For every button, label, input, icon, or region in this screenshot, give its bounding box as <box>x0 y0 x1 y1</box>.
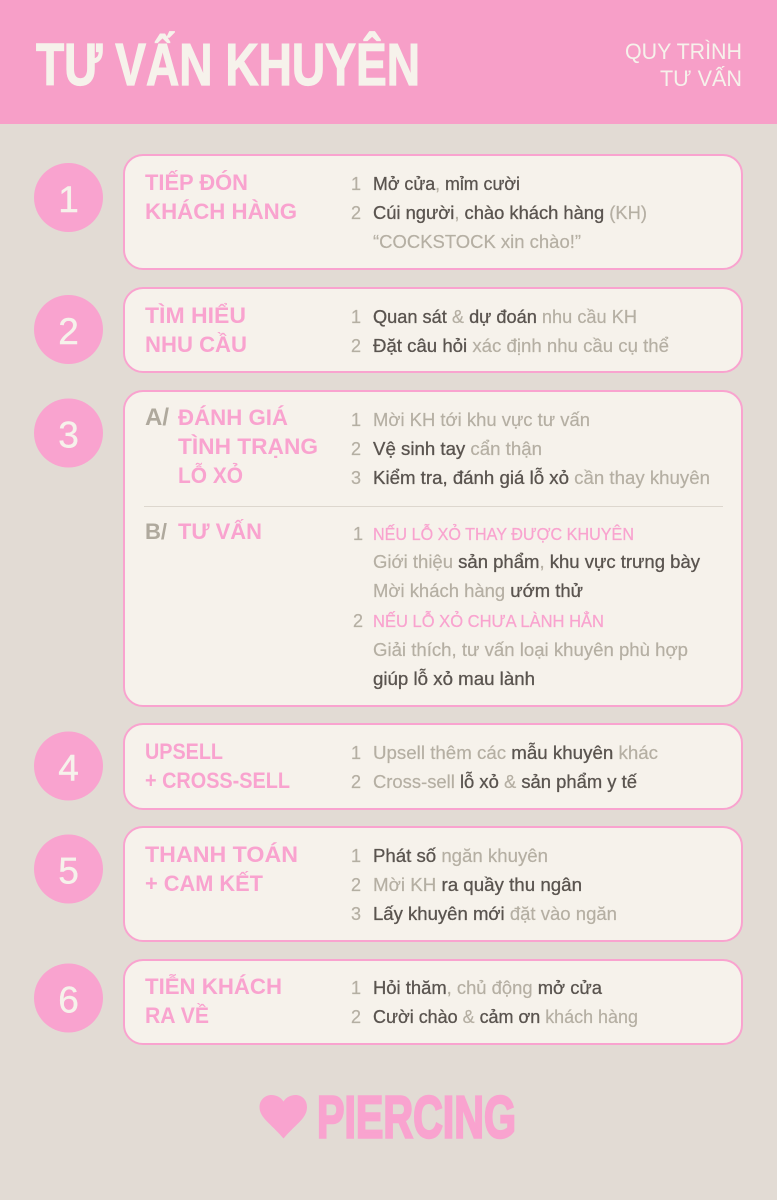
step 1 list: Cúi người, chào khách hàng (KH) <box>373 202 647 223</box>
step 2 <box>34 288 742 372</box>
header banner <box>0 0 777 124</box>
step 5 list <box>351 845 617 924</box>
logo wordmark: PIERCING <box>317 1084 516 1150</box>
step 6 list: Cười chào & cảm ơn khách hàng <box>373 1006 638 1027</box>
part B heading: B/ <box>145 519 167 544</box>
part A list: Kiểm tra, đánh giá lỗ xỏ cần thay khuyên <box>373 467 710 488</box>
step 5 list: 3 <box>351 904 361 924</box>
part A list: 2 <box>351 439 361 459</box>
step 1 heading: KHÁCH HÀNG <box>145 199 297 224</box>
subtitle: QUY TRÌNH <box>625 39 742 64</box>
step 4 <box>34 724 742 809</box>
part A list: Vệ sinh tay cẩn thận <box>373 438 542 459</box>
step 1 <box>34 155 742 269</box>
step 2 heading: NHU CẦU <box>145 332 247 357</box>
step 1 list: Mở cửa, mỉm cười <box>373 173 520 194</box>
step 5 heading: THANH TOÁN <box>145 842 298 867</box>
step 1 heading: TIẾP ĐÓN <box>145 170 248 195</box>
step 1 list: 1 <box>351 174 361 194</box>
step 3 number badge <box>34 398 103 468</box>
step 1 heading <box>145 170 297 224</box>
step 6 list: Hỏi thăm, chủ động mở cửa <box>373 977 603 998</box>
step 5 list: 2 <box>351 875 361 895</box>
subtitle: TƯ VẤN <box>660 66 742 91</box>
step 2 heading <box>145 303 247 357</box>
part A heading: ĐÁNH GIÁ <box>178 405 288 430</box>
panel: step 5 <box>124 827 742 941</box>
part A heading: A/ <box>145 404 169 431</box>
step 6 heading: RA VỀ <box>145 1003 209 1028</box>
step 2 list: Đặt câu hỏi xác định nhu cầu cụ thể <box>373 335 669 356</box>
step 6 heading: TIỄN KHÁCH <box>145 973 282 999</box>
icon: heart <box>260 1095 307 1138</box>
part B list <box>353 523 701 689</box>
step 2 heading: TÌM HIỂU <box>145 303 246 328</box>
part B list: NẾU LỖ XỎ THAY ĐƯỢC KHUYÊN <box>373 523 634 544</box>
step 5 number badge <box>34 834 103 904</box>
step 6 list: 2 <box>351 1007 361 1027</box>
step 5 number badge: 5 <box>58 850 79 892</box>
step 4 list: Cross-sell lỗ xỏ & sản phẩm y tế <box>373 771 638 792</box>
step 5 list: Mời KH ra quầy thu ngân <box>373 874 582 895</box>
step 1 list: 2 <box>351 203 361 223</box>
step 4 list: Upsell thêm các mẫu khuyên khác <box>373 742 658 763</box>
part B list: 2 <box>353 611 363 631</box>
part B list: 1 <box>353 524 363 544</box>
panel: step 2 <box>124 288 742 372</box>
panel: step 3 <box>124 391 742 706</box>
step 5 heading <box>145 842 298 896</box>
step 1 number badge: 1 <box>58 179 79 220</box>
part B list: Mời khách hàng ướm thử <box>373 580 583 601</box>
step 6 number badge: 6 <box>58 980 79 1020</box>
part A heading: TÌNH TRẠNG <box>178 434 318 459</box>
step 6 <box>34 960 742 1044</box>
step 4 list <box>351 742 658 792</box>
part A list: 1 <box>351 410 361 430</box>
step 5 list: Lấy khuyên mới đặt vào ngăn <box>373 903 617 924</box>
panel: step 1 <box>124 155 742 269</box>
step 5 list: 1 <box>351 846 361 866</box>
step 1 list: “COCKSTOCK xin chào!” <box>373 231 581 252</box>
panel: step 4 <box>124 724 742 809</box>
step 3 <box>34 391 742 706</box>
step 1 number badge <box>34 163 103 232</box>
step 6 number badge <box>34 964 103 1032</box>
step 2 number badge <box>34 295 103 364</box>
subtitle <box>625 39 742 91</box>
step 5 <box>34 827 742 941</box>
step 4 list: 1 <box>351 743 361 763</box>
step 4 number badge: 4 <box>58 748 79 788</box>
step 4 number badge <box>34 732 103 800</box>
step 6 list: 1 <box>351 978 361 998</box>
part B list: giúp lỗ xỏ mau lành <box>373 668 535 689</box>
step 4 list: 2 <box>351 772 361 792</box>
part A heading: LỖ XỎ <box>178 462 243 488</box>
step 3 number badge: 3 <box>58 414 79 456</box>
part A heading <box>145 404 318 488</box>
part B list: NẾU LỖ XỎ CHƯA LÀNH HẲN <box>373 610 604 631</box>
panel: step 6 <box>124 960 742 1044</box>
step 1 list <box>351 173 647 252</box>
part B list: Giải thích, tư vấn loại khuyên phù hợp <box>373 639 688 660</box>
logo: heart piercing <box>260 1084 516 1150</box>
step 6 list <box>351 977 638 1027</box>
part A list: Mời KH tới khu vực tư vấn <box>373 409 590 430</box>
step 4 heading: UPSELL <box>145 739 223 764</box>
part B heading: TƯ VẤN <box>178 519 262 544</box>
step 2 list: 2 <box>351 336 361 356</box>
step 4 heading <box>145 739 290 793</box>
step 6 heading <box>145 973 282 1028</box>
step 5 list: Phát số ngăn khuyên <box>373 845 548 866</box>
part B list: Giới thiệu sản phẩm, khu vực trưng bày <box>373 551 701 572</box>
part A list: 3 <box>351 468 361 488</box>
step 4 heading: + CROSS-SELL <box>145 768 290 793</box>
step 2 list <box>351 306 669 356</box>
title: TƯ VẤN KHUYÊN <box>36 31 420 98</box>
step 5 heading: + CAM KẾT <box>145 871 264 896</box>
step 2 list: 1 <box>351 307 361 327</box>
part A list <box>351 409 710 488</box>
step 2 number badge: 2 <box>58 311 79 352</box>
step 2 list: Quan sát & dự đoán nhu cầu KH <box>373 306 637 327</box>
